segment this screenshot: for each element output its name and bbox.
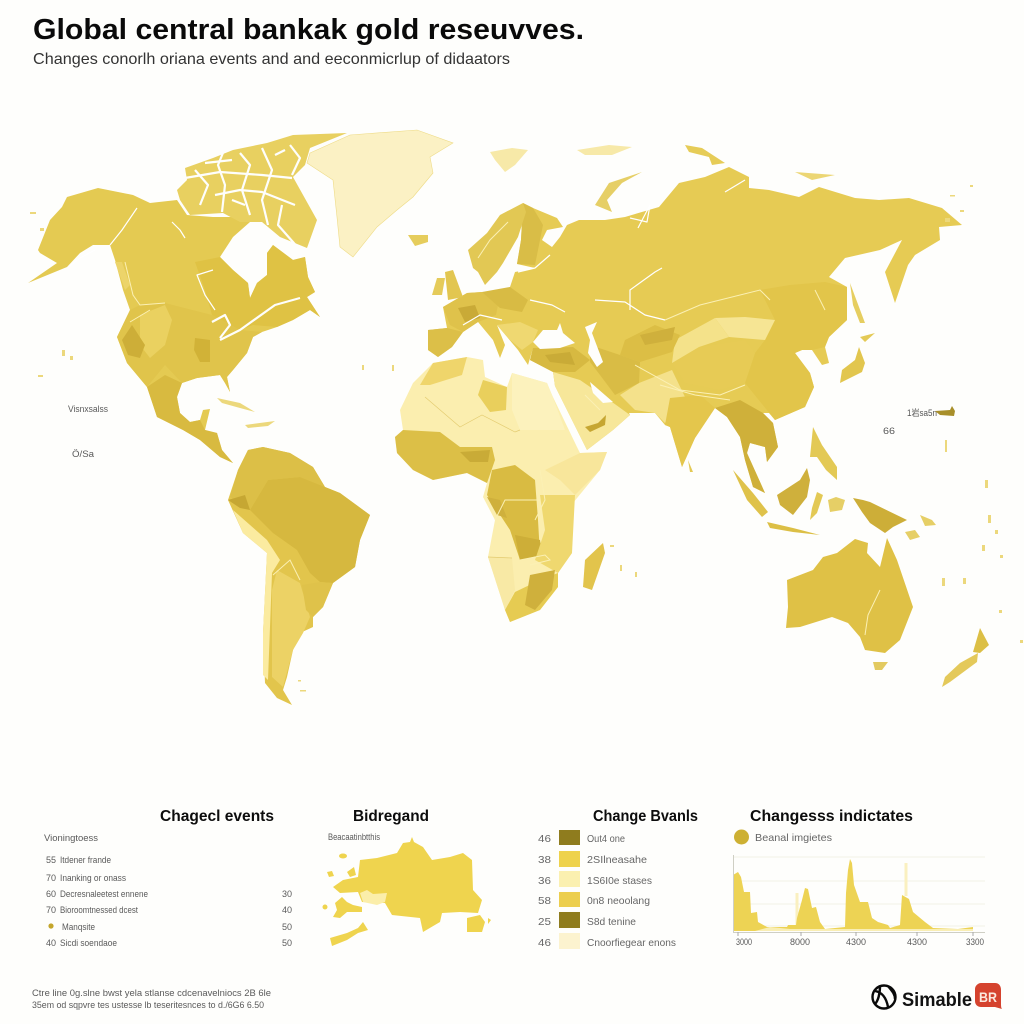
sea: caspian: [585, 322, 603, 367]
map label: pacific value: 66: [883, 426, 895, 436]
footnote: [32, 988, 271, 1010]
legend row 4: 58: [538, 895, 551, 907]
panel: change bands legend: [538, 808, 698, 949]
row 5: [48, 922, 292, 932]
region: greenland: [307, 130, 453, 257]
area chart: 3300: [966, 937, 984, 947]
row 3: [46, 889, 292, 899]
inset map shapes: [322, 837, 491, 946]
row 5: Manqsite: [62, 922, 95, 932]
region: madagascar: [583, 543, 605, 590]
row 3: 60: [46, 889, 56, 899]
footnote: Ctre line 0g.slne bwst yela stlanse cdcenavelniocs 2B 6le: [32, 988, 271, 998]
row 5: 50: [282, 922, 292, 932]
region: australia: [786, 538, 913, 670]
logo: wordmark: Simable: [902, 990, 972, 1011]
row 6: [46, 938, 292, 948]
legend row 4: [538, 892, 650, 907]
legend row 6: 46: [538, 937, 551, 949]
area chart: 8000: [790, 937, 810, 947]
region: british isles: [432, 270, 463, 300]
world map: [28, 130, 1023, 705]
inset caption: Beacaatinbtthis: [328, 832, 380, 842]
area chart: 4300: [907, 937, 927, 947]
area chart: 3000: [736, 937, 752, 947]
region: africa: [395, 357, 607, 622]
row 3: Decresnaleetest ennene: [60, 889, 148, 899]
region: eurasia: [428, 167, 962, 493]
legend row 5: 25: [538, 916, 551, 928]
area chart: [733, 855, 985, 947]
row 3: 30: [282, 889, 292, 899]
legend row 6: [538, 933, 676, 949]
row 4: 70: [46, 905, 56, 915]
legend row 1: [538, 830, 625, 845]
legend row 2: [538, 851, 647, 867]
row 1: 55: [46, 855, 56, 865]
region: north america: [28, 188, 320, 463]
region: canadian arctic islands: [177, 133, 347, 250]
sea: black sea: [533, 323, 575, 349]
row 4: [46, 905, 292, 915]
row 6: Sicdi soendaoe: [60, 938, 117, 948]
map label: pacific: [907, 406, 955, 418]
row 2: 70: [46, 873, 56, 883]
logo: [872, 983, 1002, 1011]
legend row 1: Out4 one: [587, 833, 625, 845]
region: southeast asia islands: [688, 427, 936, 540]
map label: west value: Ö/Sa: [72, 449, 94, 459]
heading: change bands: Change Bvanls: [593, 808, 698, 825]
legend row 3: 1S6I0e stases: [587, 875, 652, 887]
legend row 2: 38: [538, 854, 551, 866]
logo: red badge: BR: [979, 989, 997, 1005]
region: new zealand: [942, 628, 989, 687]
region: arctic islands: [490, 145, 835, 212]
row 1: Itdener frande: [60, 855, 111, 865]
chart legend: Beanal imgietes: [755, 832, 832, 844]
legend row 3: [538, 871, 652, 887]
chart legend: [734, 830, 832, 844]
heading: regional: Bidregand: [353, 808, 429, 825]
legend row 2: 2SIlneasahe: [587, 854, 647, 866]
row 4: 40: [282, 905, 292, 915]
legend row 5: S8d tenine: [587, 916, 636, 928]
region: caribbean and scattered islands: [30, 185, 1023, 692]
map label: pacific: 1岩sa5n: [907, 407, 937, 418]
row 6: 50: [282, 938, 292, 948]
row 6: 40: [46, 938, 56, 948]
heading: changed events: Chagecl events: [160, 808, 274, 825]
legend row 1: 46: [538, 833, 551, 845]
legend row 4: 0n8 neoolang: [587, 895, 650, 907]
area chart: 4300: [846, 937, 866, 947]
logo: ball icon: [872, 986, 896, 1008]
region: iceland: [408, 235, 428, 246]
heading: indicators: Changesss indictates: [750, 808, 913, 825]
list caption: Vioningtoess: [44, 833, 99, 843]
region: japan and sakhalin: [840, 283, 875, 383]
title: Global central bankak gold reseuvves.: [33, 14, 584, 46]
panel: change indicators chart: [733, 808, 985, 947]
region: south america: [228, 447, 370, 705]
subtitle: Changes conorlh oriana events and and eeconmicrlup of didaators: [33, 51, 510, 68]
sea: persian gulf: [590, 382, 613, 403]
map label: west: Visnxsalss: [68, 404, 108, 414]
panel: changed events: [44, 808, 292, 948]
row 4: Bioroomtnessed dcest: [60, 905, 138, 915]
panel: regional inset map: [322, 808, 491, 946]
footnote: 35em od sqpvre tes ustesse lb teseritesnces to d./6G6 6.50: [32, 1000, 264, 1010]
row 2: Inanking or onass: [60, 873, 126, 883]
region: scandinavia: [468, 203, 526, 285]
legend row 5: [538, 912, 636, 928]
legend row 6: Cnoorfiegear enons: [587, 937, 676, 949]
legend row 3: 36: [538, 875, 551, 887]
